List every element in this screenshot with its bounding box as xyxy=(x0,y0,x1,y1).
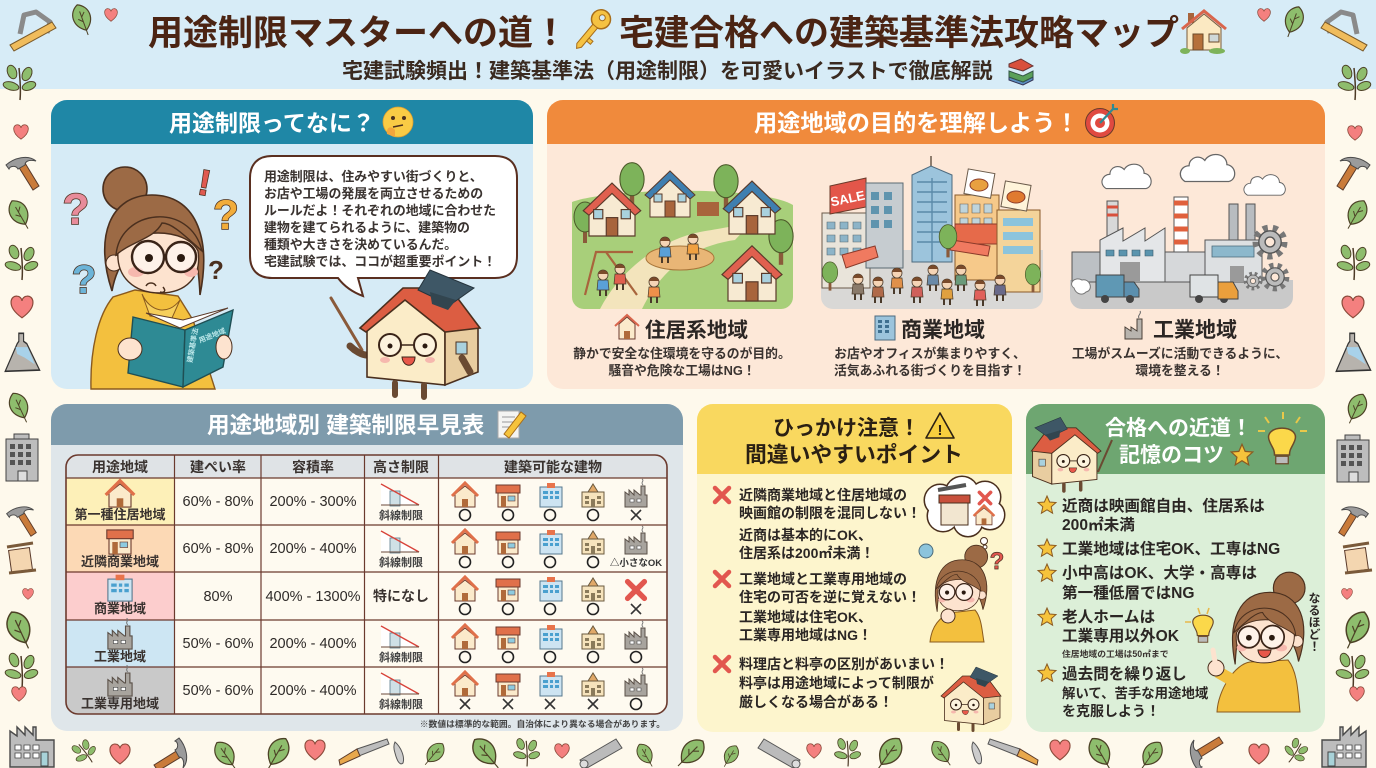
illustration: residential scene xyxy=(572,163,793,309)
table header row: 用途地域 xyxy=(92,459,148,475)
mistake 2: 住宅の可否を逆に覚えない！ xyxy=(739,589,921,605)
tip 5: を克服しよう！ xyxy=(1062,703,1160,719)
mistake 2 xyxy=(715,571,921,643)
row: neighborhood commercial xyxy=(81,526,662,569)
text: commercial description: 活気あふれる街づくりを目指す！ xyxy=(834,363,1026,378)
heading: ひっかけ注意！ xyxy=(773,417,920,440)
icon: warning xyxy=(926,413,954,439)
tip 4: 住居地域の工場は50㎡まで xyxy=(1062,648,1169,659)
row: commercial: 80% xyxy=(203,589,233,605)
text: industrial description: 環境を整える！ xyxy=(1135,363,1225,378)
row: commercial xyxy=(94,575,644,616)
icons: question marks: ! xyxy=(195,161,214,204)
text: residential description xyxy=(573,346,791,378)
tip 3 xyxy=(1038,563,1257,602)
label: industrial: 工業地域 xyxy=(1153,319,1237,342)
mistake 3 xyxy=(715,656,949,710)
panel: common mistakes xyxy=(697,404,1012,732)
subtitle: 宅建試験頻出！建築基準法（用途制限）を可愛いイラストで徹底解説 xyxy=(342,60,993,83)
table header row: 容積率 xyxy=(292,459,334,475)
icon: warning: ! xyxy=(938,422,942,439)
table xyxy=(66,455,667,714)
mistake 1: 近商は基本的にOK、 xyxy=(739,527,872,543)
tip 5: 解いて、苦手な用途地域 xyxy=(1062,685,1209,701)
row: exclusive industrial: 200% - 400% xyxy=(269,683,357,699)
mistake 1: 近隣商業地域と住居地域の xyxy=(739,487,907,503)
header band xyxy=(0,0,1376,89)
icons: sweat and question mark: ? xyxy=(990,548,1004,575)
tip 3: 小中高はOK、大学・高専は xyxy=(1062,563,1257,582)
row: industrial: 工業地域 xyxy=(94,649,146,664)
tip 2: 工業地域は住宅OK、工専はNG xyxy=(1062,539,1280,558)
icons: question marks: ? xyxy=(63,185,89,234)
table header row: 建ぺい率 xyxy=(190,459,246,475)
icons: question marks xyxy=(63,161,239,302)
row: neighborhood commercial: △小さなOK xyxy=(610,557,662,569)
tip 4: 老人ホームは xyxy=(1062,608,1156,626)
icon: office building xyxy=(875,316,895,340)
speech bubble: 宅建試験では、ココが超重要ポイント！ xyxy=(264,254,496,269)
row: exclusive industrial: 工業専用地域 xyxy=(81,696,159,711)
row: commercial: 商業地域 xyxy=(94,601,146,616)
illustration: commercial scene xyxy=(821,156,1043,309)
label: commercial: 商業地域 xyxy=(901,319,985,342)
text: residential description: 静かで安全な住環境を守るのが目的。 xyxy=(573,346,791,361)
panel: what is use restriction xyxy=(51,100,533,397)
book: 建築基準法 xyxy=(185,327,200,363)
heading xyxy=(745,417,963,467)
title xyxy=(148,6,1179,54)
speech bubble xyxy=(250,156,517,296)
tip 4: 工業専用以外OK xyxy=(1062,626,1180,645)
illustration: industrial scene xyxy=(1070,154,1293,309)
row: industrial: 斜線制限 xyxy=(379,650,423,664)
row: commercial: 400% - 1300% xyxy=(266,589,361,605)
mistake 2: 工業専用地域はNG！ xyxy=(739,627,872,643)
row: exclusive industrial xyxy=(81,665,647,711)
row: industrial xyxy=(94,618,647,664)
illustration: small house mascot xyxy=(941,667,1001,730)
icon: thinking face xyxy=(383,107,413,137)
speech bubble: 用途制限は、住みやすい街づくりと、 xyxy=(264,169,483,184)
row: first-class residential: 200% - 300% xyxy=(269,494,357,510)
row: industrial: 200% - 400% xyxy=(269,636,357,652)
panel: memory tips xyxy=(1026,404,1325,732)
heading: 用途制限ってなに？ xyxy=(169,110,375,136)
book xyxy=(128,308,233,387)
row: neighborhood commercial: 200% - 400% xyxy=(269,541,357,557)
row: exclusive industrial: 斜線制限 xyxy=(379,697,423,711)
heading: 記憶のコツ xyxy=(1119,444,1224,467)
text: industrial description: 工場がスムーズに活動できるように、 xyxy=(1072,346,1288,361)
table header row: 高さ制限 xyxy=(373,459,429,475)
tip 5 xyxy=(1038,664,1209,719)
thought bubble xyxy=(925,477,1004,549)
row: neighborhood commercial: 近隣商業地域 xyxy=(81,554,159,569)
label: industrial xyxy=(1125,311,1237,342)
panel header xyxy=(547,100,1325,144)
tip 1 xyxy=(1038,496,1265,534)
mistake 2: 工業地域と工業専用地域の xyxy=(739,571,907,587)
mistake 1: 住居系は200㎡未満！ xyxy=(739,545,874,561)
illustration: woman with idea xyxy=(1208,572,1305,712)
book: 用途地域 xyxy=(197,326,227,345)
mistake 1 xyxy=(715,487,921,561)
illustration: thinking woman xyxy=(919,544,1004,642)
tip 5: 過去問を繰り返し xyxy=(1062,664,1187,683)
text: residential description: 騒音や危険な工場はNG！ xyxy=(608,363,756,378)
heading: 用途地域の目的を理解しよう！ xyxy=(754,110,1079,136)
icon: small bulb xyxy=(1185,608,1213,642)
tip 3: 第一種低層ではNG xyxy=(1062,583,1195,602)
speech bubble: ルールだよ！それぞれの地域に合わせた xyxy=(264,203,496,218)
icon: factory xyxy=(1125,311,1142,339)
heading: 用途地域別 建築制限早見表 xyxy=(207,413,485,438)
icons: question marks: ? xyxy=(72,258,96,302)
illustration: mascot in heading xyxy=(1031,417,1112,491)
mistake 2: 工業地域は住宅OK、 xyxy=(739,609,872,625)
speech bubble: 建物を建てられるように、建築物の xyxy=(264,220,470,235)
row: neighborhood commercial: 60% - 80% xyxy=(183,541,254,557)
illustration: woman reading xyxy=(91,167,233,389)
icon: light bulb xyxy=(1258,412,1307,464)
title: 用途制限マスターへの道！ xyxy=(148,14,568,53)
icon: star in heading xyxy=(1231,444,1253,465)
panel header xyxy=(697,404,1012,474)
panel: restrictions table xyxy=(51,404,683,731)
icons: question marks: ? xyxy=(213,191,239,238)
panel: purpose of use districts xyxy=(547,100,1325,389)
icon: target xyxy=(1086,104,1118,138)
illustration: commercial scene: SALE xyxy=(829,188,867,209)
mistake 3: 厳しくなる場合がある！ xyxy=(739,694,893,710)
tip 1: 200㎡未満 xyxy=(1062,515,1135,534)
icon: key xyxy=(569,6,614,54)
row: exclusive industrial: 50% - 60% xyxy=(183,683,254,699)
row: neighborhood commercial: 斜線制限 xyxy=(379,555,423,569)
speech bubble: 種類や大きさを決めているんだ。 xyxy=(264,237,457,252)
panel header xyxy=(51,100,533,144)
icon: house in title xyxy=(1180,11,1226,54)
speech bubble: お店や工場の発展を両立させるための xyxy=(264,186,483,201)
tip 1: 近商は映画館自由、住居系は xyxy=(1062,496,1265,515)
row: first-class residential: 60% - 80% xyxy=(183,494,254,510)
heading xyxy=(1105,417,1252,467)
heading: 合格への近道！ xyxy=(1105,417,1252,440)
icon: house xyxy=(615,315,639,339)
row: first-class residential xyxy=(74,479,647,522)
tip 4 xyxy=(1038,608,1180,659)
illustration: house mascot with pointer xyxy=(331,270,480,397)
panel header xyxy=(51,404,683,445)
label: residential: 住居系地域 xyxy=(645,319,748,342)
row: industrial: 50% - 60% xyxy=(183,636,254,652)
title: 宅建合格への建築基準法攻略マップ xyxy=(619,14,1179,53)
text: commercial description: お店やオフィスが集まりやすく、 xyxy=(834,346,1026,361)
text: industrial description xyxy=(1072,346,1288,378)
vertical note: なるほど！ xyxy=(1307,592,1321,652)
table header row: 建築可能な建物 xyxy=(504,459,602,475)
row: commercial: 特になし xyxy=(373,588,429,604)
heading: 間違いやすいポイント xyxy=(745,442,963,467)
mistake 3: 料亭は用途地域によって制限が xyxy=(739,675,934,691)
footnote: ※数値は標準的な範囲。自治体により異なる場合があります。 xyxy=(420,718,665,729)
row: first-class residential: 斜線制限 xyxy=(379,508,423,522)
panel header xyxy=(1026,404,1325,474)
icons: question marks: ? xyxy=(208,255,224,285)
label: commercial xyxy=(875,316,985,342)
text: commercial description xyxy=(834,346,1026,378)
label: residential xyxy=(615,315,748,342)
mistake 3: 料理店と料亭の区別があいまい！ xyxy=(739,656,949,672)
table header row xyxy=(92,459,602,475)
row: first-class residential: 第一種住居地域 xyxy=(74,507,166,522)
mistake 1: 映画館の制限を混同しない！ xyxy=(739,505,921,521)
icon: memo xyxy=(498,411,526,438)
icon: books xyxy=(1009,59,1033,85)
